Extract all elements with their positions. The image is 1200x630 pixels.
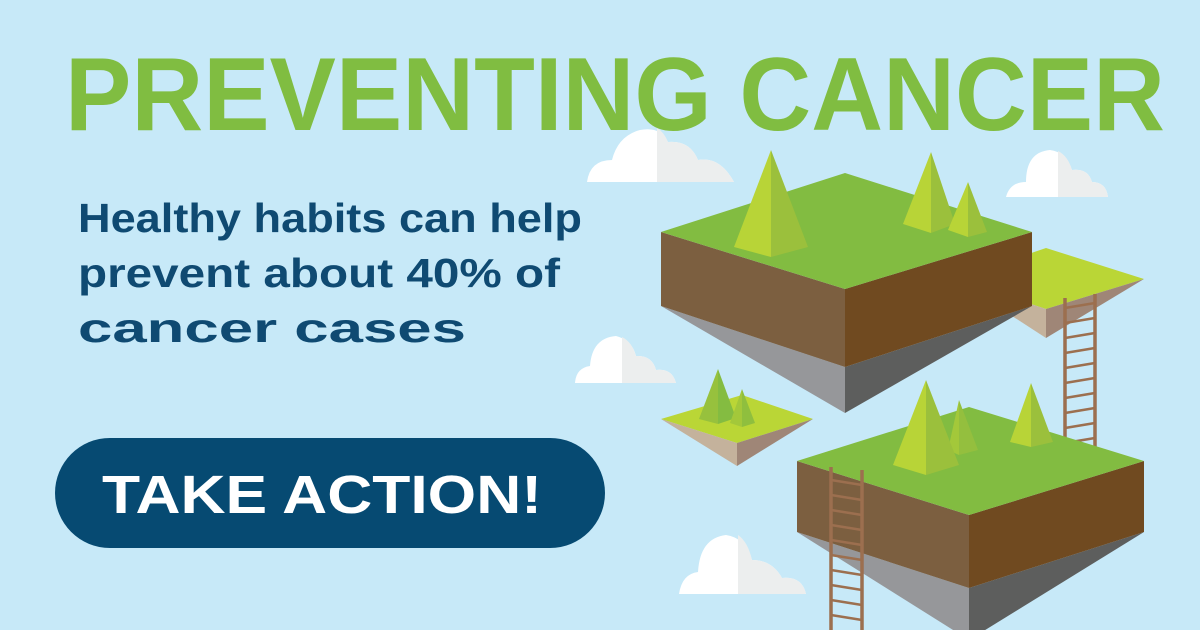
island: large bottom [797,380,1144,630]
button: take action [55,438,605,548]
island: large top [661,150,1032,413]
subtitle [78,195,582,351]
title: PREVENTING CANCER [65,37,1165,153]
subtitle: cancer cases [78,305,466,351]
button: take action: TAKE ACTION! [102,465,542,525]
cloud: top right [1006,150,1108,197]
cloud: middle [575,336,676,383]
trees on large island [734,150,987,257]
ladder: upper [1065,294,1095,453]
island: small right [955,248,1144,338]
subtitle: prevent about 40% of [78,250,560,296]
cloud: bottom [679,535,806,594]
ladder: lower [831,467,862,630]
island: small left [661,369,813,466]
subtitle: Healthy habits can help [78,195,582,241]
trees on bottom island [893,380,1053,475]
cloud: top left [587,128,734,182]
